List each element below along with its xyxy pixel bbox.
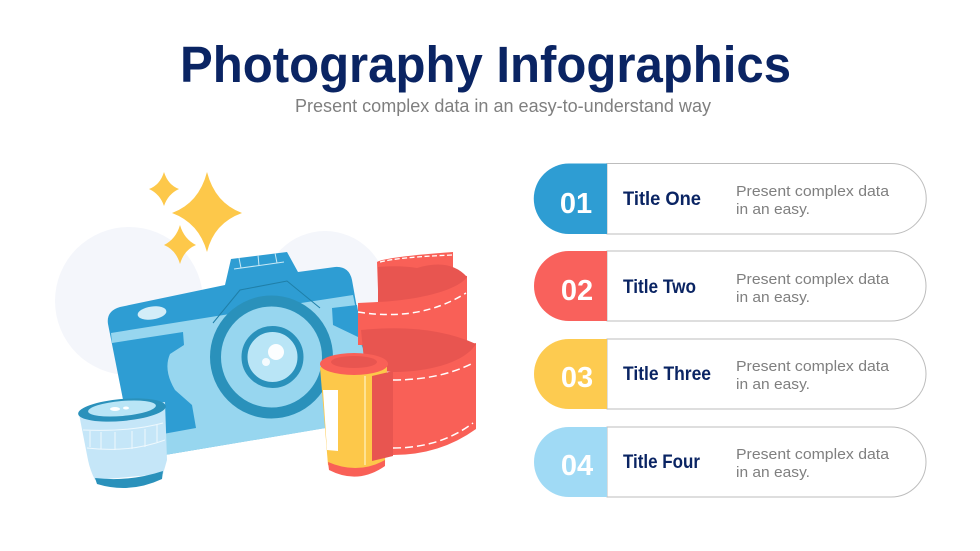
item 02: Title Two	[623, 277, 696, 298]
illustration: camera, lens, film	[55, 172, 476, 488]
item 01: Present complex data	[736, 183, 890, 200]
item 04: in an easy.	[736, 464, 810, 481]
camera body	[108, 252, 365, 460]
subtitle: Present complex data in an easy-to-understand way	[295, 96, 711, 116]
item 04: Title Four	[623, 452, 701, 473]
title: Photography Infographics	[180, 36, 791, 93]
icon: spare lens	[77, 395, 167, 488]
item 01	[534, 164, 926, 234]
item 04	[534, 427, 926, 497]
icon: camera	[108, 252, 370, 460]
item 03: 03	[561, 362, 593, 394]
item 03: in an easy.	[736, 376, 810, 393]
prism lines	[213, 281, 320, 323]
viewfinder	[234, 253, 284, 269]
item 01: 01	[560, 188, 592, 220]
flash window	[137, 305, 167, 321]
item 02: Present complex data	[736, 271, 890, 288]
background circles	[55, 227, 387, 375]
lens highlights	[268, 344, 284, 360]
item 01: in an easy.	[736, 201, 810, 218]
camera light front panel	[111, 295, 370, 460]
item 03: Title Three	[623, 364, 711, 385]
lower film	[393, 343, 476, 455]
camera right grip	[332, 305, 365, 353]
item 03: Present complex data	[736, 358, 890, 375]
item 02: in an easy.	[736, 289, 810, 306]
item 03	[534, 339, 926, 409]
item 02	[534, 251, 926, 321]
icon: film canister	[320, 353, 393, 477]
item 01: Title One	[623, 189, 701, 210]
item 04: 04	[561, 450, 593, 482]
icon: film strip	[358, 252, 476, 455]
item 04: Present complex data	[736, 446, 890, 463]
item 02: 02	[561, 275, 593, 307]
upper film	[377, 252, 453, 290]
icon: sparkles	[149, 172, 242, 264]
lens rings	[216, 301, 328, 413]
